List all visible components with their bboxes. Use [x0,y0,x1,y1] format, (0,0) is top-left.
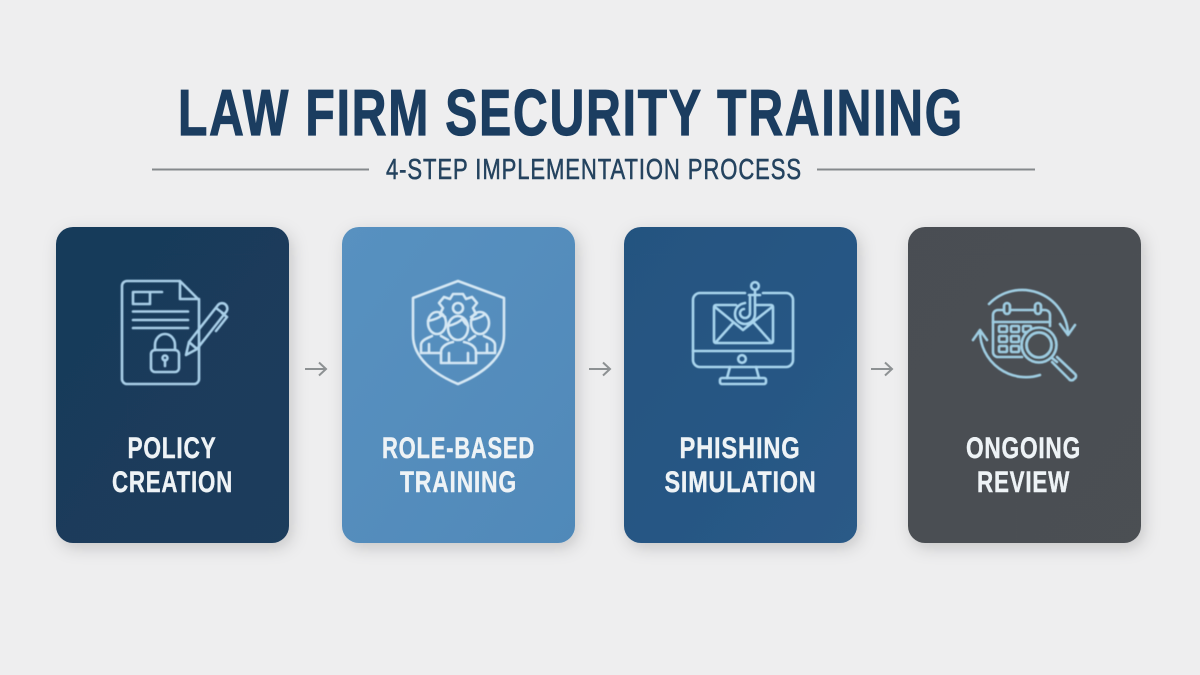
label: ONGOING [966,432,1081,465]
label: PHISHING [680,432,800,465]
panel: policy creation [56,227,289,543]
label [112,432,233,499]
icon: calendar, magnifier and cycle arrows [973,290,1076,380]
label: REVIEW [977,466,1070,499]
label: POLICY [128,432,216,465]
label: ROLE-BASED [382,432,535,465]
icon: shield with people and gear [413,281,504,384]
arrow 1 [305,362,326,376]
arrow 2 [589,362,610,376]
icon: monitor with hooked envelope [693,282,793,384]
panel: phishing simulation [624,227,857,543]
panel: ongoing review [908,227,1141,543]
subtitle with rules: 4-STEP IMPLEMENTATION PROCESS [386,154,802,186]
label [664,432,816,499]
label: TRAINING [400,466,517,499]
label: CREATION [112,466,233,499]
label: SIMULATION [664,466,816,499]
icon: document with lock and pen [122,281,227,384]
panel: role-based training [342,227,575,543]
label [966,432,1081,499]
arrow 3 [871,362,892,376]
label [382,432,535,499]
